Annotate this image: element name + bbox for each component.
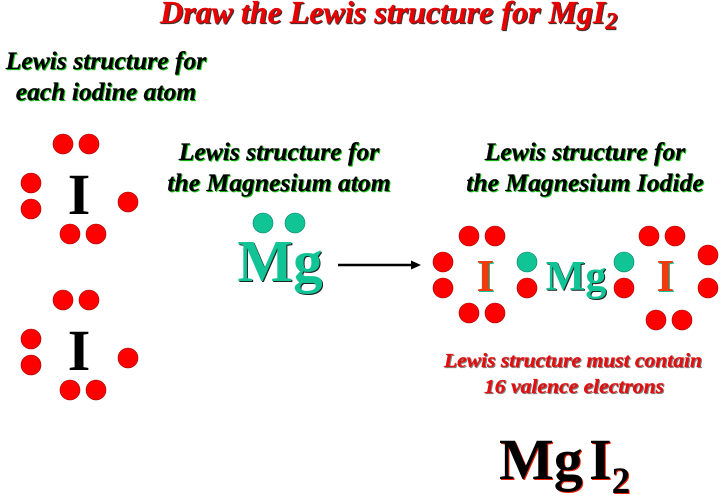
arrow [338, 260, 421, 270]
heading: iodine atom [5, 46, 207, 106]
note: valence electrons: Lewis structure must contain [443, 351, 702, 372]
formula: Mg [499, 427, 583, 492]
heading: magnesium atom: the Magnesium atom [167, 168, 391, 197]
iodine atom 2 [21, 290, 138, 400]
left iodine [433, 226, 505, 323]
heading: iodine atom: each iodine atom [16, 77, 196, 106]
note: valence electrons: 16 valence electrons [484, 377, 664, 398]
title: 2 [604, 9, 617, 35]
heading: magnesium iodide: the Magnesium Iodide [466, 168, 704, 197]
central magnesium [517, 252, 634, 300]
heading: magnesium iodide: Lewis structure for [484, 137, 686, 166]
heading: magnesium iodide [466, 137, 704, 197]
magnesium iodide structure [433, 226, 718, 330]
central magnesium: Mg [546, 254, 606, 300]
heading: magnesium atom: Lewis structure for [178, 137, 380, 166]
formula [499, 427, 630, 497]
left iodine: I [477, 250, 494, 301]
iodine atom 1: I [68, 162, 90, 227]
iodine atom 2: I [68, 318, 90, 383]
formula: I [589, 427, 612, 492]
iodine atom 1 [21, 134, 138, 244]
heading: iodine atom: Lewis structure for [5, 46, 207, 75]
right iodine [639, 226, 718, 330]
magnesium atom: Mg [237, 228, 323, 294]
heading: magnesium atom [167, 137, 391, 197]
right iodine: I [657, 250, 674, 301]
note: valence electrons [443, 351, 702, 398]
